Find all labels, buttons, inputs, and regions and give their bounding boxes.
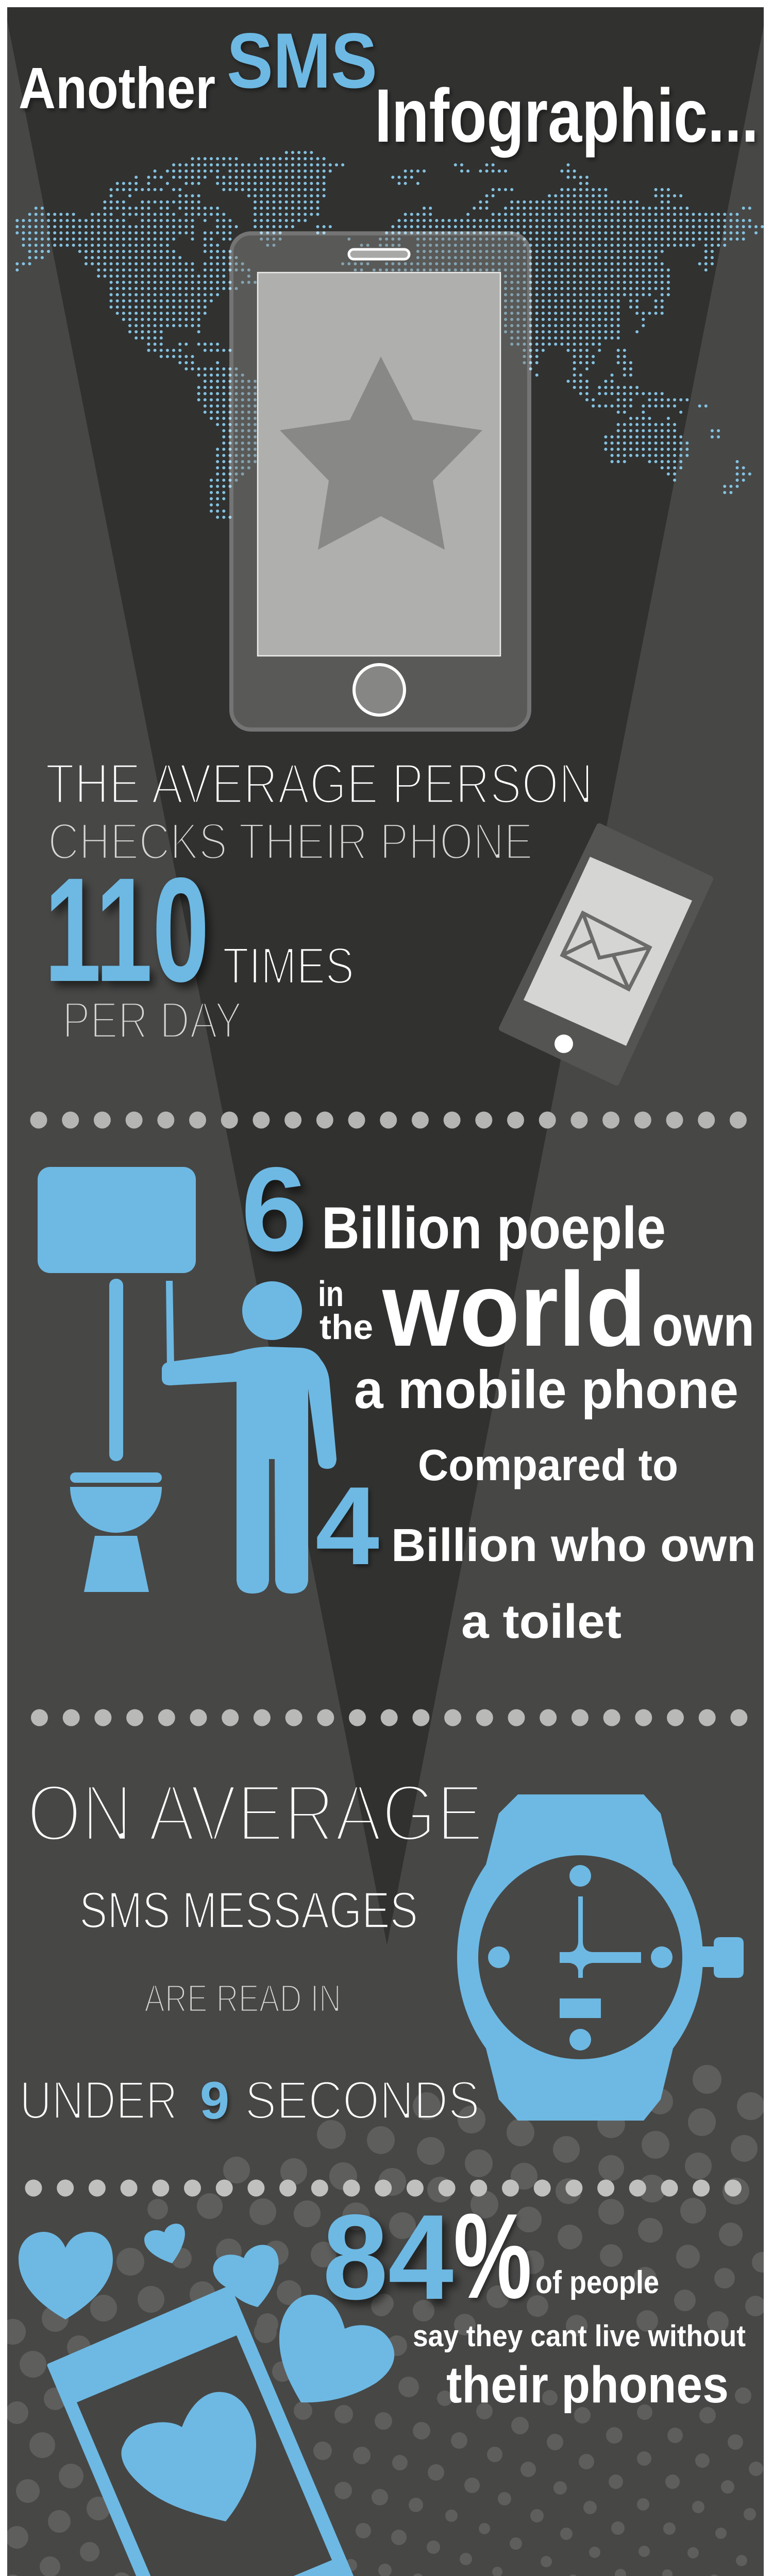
heart 3 xyxy=(213,2245,279,2307)
text: 6 billion people in the world own a mobile phone compared to 4 billion who own a toilet: Compared to xyxy=(418,1441,678,1490)
divider dots 3 xyxy=(33,2179,734,2197)
tilted phone screen xyxy=(524,857,692,1046)
phone bezel ring xyxy=(231,233,529,730)
text: 6 billion people in the world own a mobile phone compared to 4 billion who own a toilet: Billion poeple xyxy=(322,1195,666,1261)
large phone with star xyxy=(231,233,529,730)
text: 6 billion people in the world own a mobile phone compared to 4 billion who own a toilet: world xyxy=(382,1250,646,1368)
hour markers xyxy=(488,1865,673,2050)
toilet icon xyxy=(38,1167,196,1592)
text: the average person checks their phone 110 times per day: PER DAY xyxy=(62,991,242,1049)
text: on average sms messages are read in under 9 seconds: ON AVERAGE xyxy=(27,1768,483,1858)
tilted phone with envelope xyxy=(502,826,710,1082)
text: 6 billion people in the world own a mobile phone compared to 4 billion who own a toilet: a toilet xyxy=(461,1595,621,1648)
text: on average sms messages are read in under 9 seconds: ARE READ IN xyxy=(144,1976,341,2020)
text: on average sms messages are read in under 9 seconds: UNDER xyxy=(20,2070,178,2131)
text: 84% of people say they cant live without their phones: % xyxy=(453,2188,532,2324)
dotted world map xyxy=(17,152,763,517)
blue phone screen xyxy=(77,2335,332,2576)
heart 1 xyxy=(19,2232,113,2319)
flush pipe xyxy=(109,1279,123,1461)
toilet seat xyxy=(70,1472,162,1483)
text: 6 billion people in the world own a mobile phone compared to 4 billion who own a toilet: Billion who own xyxy=(391,1520,756,1571)
text: 84% of people say they cant live without their phones: their phones xyxy=(446,2356,729,2414)
divider dots 1 xyxy=(39,1112,738,1128)
phone screen xyxy=(258,273,500,656)
text: 84% of people say they cant live without their phones: 84 xyxy=(323,2189,453,2325)
blue phone body xyxy=(49,2287,365,2576)
pull chain xyxy=(166,1281,174,1368)
toilet bowl xyxy=(70,1487,162,1533)
title xyxy=(19,17,759,158)
heart 2 xyxy=(144,2224,185,2263)
phone speaker xyxy=(349,249,409,259)
floating hearts xyxy=(19,2224,394,2402)
title: Another xyxy=(19,56,215,121)
text: 84% of people say they cant live without their phones xyxy=(323,2188,746,2414)
text: 6 billion people in the world own a mobile phone compared to 4 billion who own a toilet: the xyxy=(320,1308,373,1347)
home button xyxy=(554,1035,573,1053)
star icon xyxy=(280,357,482,550)
text: the average person checks their phone 110 times per day: TIMES xyxy=(223,937,354,995)
body xyxy=(162,1347,337,1594)
text: on average sms messages are read in under 9 seconds: SMS MESSAGES xyxy=(79,1882,418,1939)
title: SMS xyxy=(227,17,377,105)
text: the average person checks their phone 110 times per day xyxy=(44,752,593,1049)
cistern tank xyxy=(38,1167,196,1273)
phone body xyxy=(233,235,527,727)
text: 84% of people say they cant live without their phones: say they cant live without xyxy=(413,2319,746,2353)
watch strap and case xyxy=(457,1794,703,2121)
tilted phone body xyxy=(502,826,710,1082)
person icon xyxy=(162,1281,337,1594)
head xyxy=(242,1281,302,1340)
text: 84% of people say they cant live without their phones: of people xyxy=(535,2265,659,2300)
text: 6 billion people in the world own a mobile phone compared to 4 billion who own a toilet: 6 xyxy=(241,1143,307,1276)
text: 6 billion people in the world own a mobile phone compared to 4 billion who own a toilet: own xyxy=(652,1294,754,1358)
home button xyxy=(354,665,405,715)
text: on average sms messages are read in under 9 seconds: 9 xyxy=(200,2071,229,2130)
wristwatch icon xyxy=(457,1794,744,2121)
envelope icon xyxy=(562,913,650,989)
text: the average person checks their phone 110 times per day: CHECKS THEIR PHONE xyxy=(48,813,533,871)
watch crown xyxy=(700,1937,744,1978)
text: 6 billion people in the world own a mobile phone compared to 4 billion who own a toilet: in xyxy=(318,1274,344,1314)
divider dots 2 xyxy=(39,1709,739,1726)
text: the average person checks their phone 110 times per day: 110 xyxy=(44,847,209,1013)
heart 4 xyxy=(279,2295,394,2402)
text: 6 billion people in the world own a mobile phone compared to 4 billion who own a toilet: 4 xyxy=(315,1463,379,1588)
tilted blue phone with heart xyxy=(49,2287,365,2576)
text: 6 billion people in the world own a mobile phone compared to 4 billion who own a toilet: a mobile phone xyxy=(354,1360,738,1420)
text: 6 billion people in the world own a mobile phone compared to 4 billion who own a toilet xyxy=(241,1143,756,1648)
heart on screen xyxy=(121,2392,256,2521)
toilet base xyxy=(84,1536,149,1592)
text: on average sms messages are read in under 9 seconds xyxy=(20,1768,483,2131)
text: the average person checks their phone 110 times per day: THE AVERAGE PERSON xyxy=(45,752,593,816)
watch hands xyxy=(560,1896,641,1978)
watch face xyxy=(478,1855,682,2059)
text: on average sms messages are read in under 9 seconds: SECONDS xyxy=(245,2070,480,2131)
